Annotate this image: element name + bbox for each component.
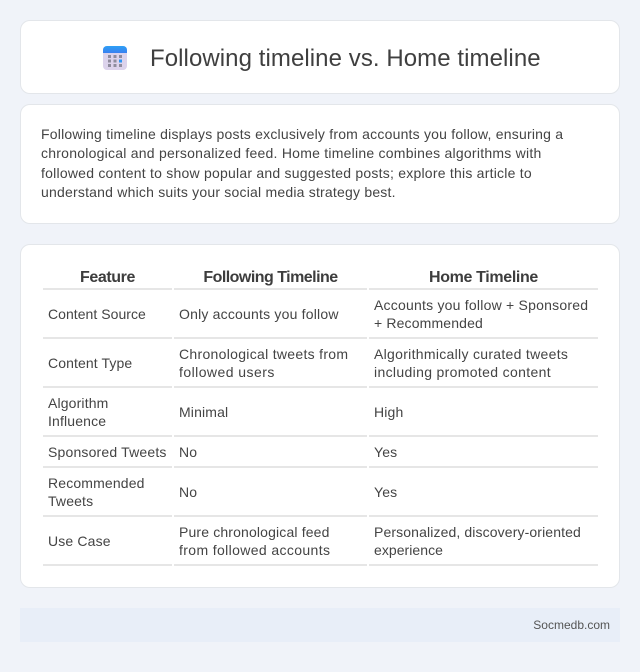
row: content type: Algorithmically curated tweets — [374, 346, 568, 362]
row: use case: Personalized, discovery-oriented — [374, 524, 581, 540]
row: content type: including promoted content — [374, 364, 551, 380]
row: algorithm influence: Algorithm — [48, 395, 108, 411]
intro text: understand which suits your social media strategy best. — [41, 184, 396, 200]
row: content source: Accounts you follow + Sponsored — [374, 297, 588, 313]
title card — [20, 20, 620, 94]
row: sponsored tweets: Yes — [374, 444, 397, 460]
row: content source: Only accounts you follow — [179, 306, 339, 322]
footer bar — [20, 608, 620, 642]
header row — [43, 269, 598, 290]
intro text: Following timeline displays posts exclusively from accounts you follow, ensuring a — [41, 126, 563, 142]
intro text: chronological and personalized feed. Home timeline combines algorithms with — [41, 145, 541, 161]
row: recommended tweets — [43, 475, 598, 517]
row: content source: Content Source — [48, 306, 146, 322]
row: sponsored tweets — [43, 444, 598, 468]
row: use case: from followed accounts — [179, 542, 330, 558]
table card — [20, 244, 620, 588]
row: content type: Content Type — [48, 355, 132, 371]
intro text: followed content to show popular and suggested posts; explore this article to — [41, 165, 532, 181]
row: content type: Chronological tweets from — [179, 346, 348, 362]
row: use case: experience — [374, 542, 443, 558]
comparison table — [43, 269, 598, 566]
icon: calendar — [103, 46, 127, 70]
row: algorithm influence — [43, 395, 598, 437]
row: recommended tweets: No — [179, 484, 197, 500]
row: recommended tweets: Yes — [374, 484, 397, 500]
header row: Feature — [80, 269, 135, 286]
row: algorithm influence: High — [374, 404, 403, 420]
row: use case: Use Case — [48, 533, 111, 549]
row: algorithm influence: Influence — [48, 413, 106, 429]
row: use case: Pure chronological feed — [179, 524, 330, 540]
row: content source — [43, 297, 598, 339]
intro card — [20, 104, 620, 224]
row: algorithm influence: Minimal — [179, 404, 228, 420]
header row: Following Timeline — [203, 269, 338, 286]
row: content type: followed users — [179, 364, 275, 380]
row: recommended tweets: Tweets — [48, 493, 93, 509]
row: recommended tweets: Recommended — [48, 475, 145, 491]
footer source text: Socmedb.com — [533, 618, 610, 632]
title: Following timeline vs. Home timeline — [150, 45, 541, 72]
row: use case — [43, 524, 598, 566]
row: content source: + Recommended — [374, 315, 483, 331]
row: sponsored tweets: No — [179, 444, 197, 460]
header row: Home Timeline — [429, 269, 538, 286]
row: sponsored tweets: Sponsored Tweets — [48, 444, 167, 460]
row: content type — [43, 346, 598, 388]
intro text — [41, 126, 564, 200]
